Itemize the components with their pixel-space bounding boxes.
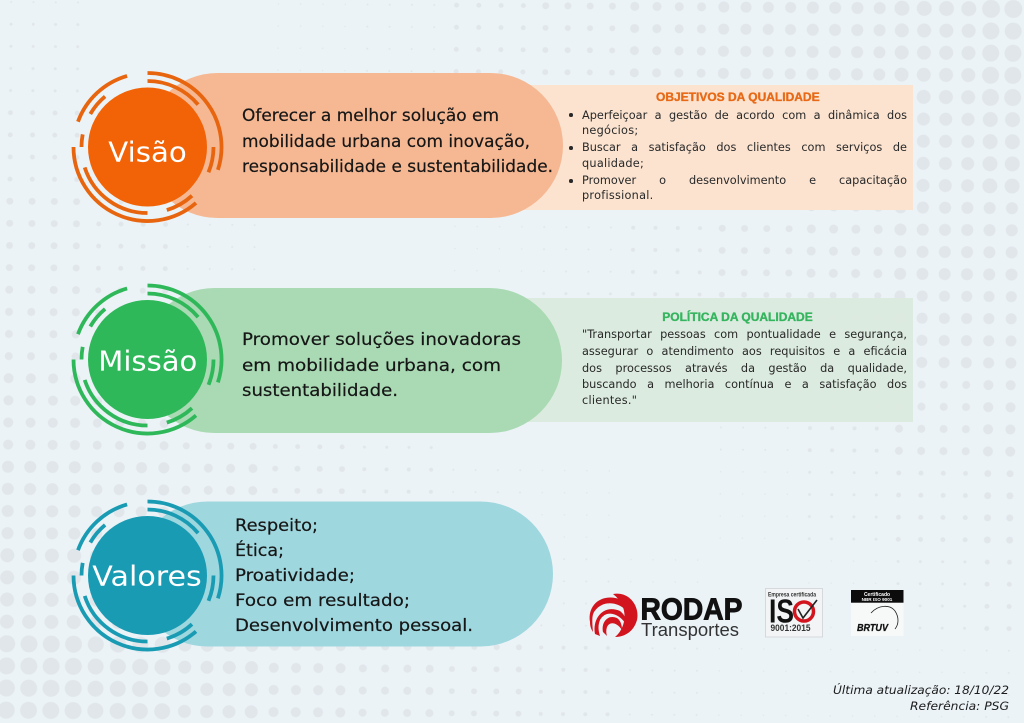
icon: rings Visão <box>73 73 222 221</box>
text: lista de valores <box>235 516 473 636</box>
icon: red O with check <box>794 600 817 621</box>
wordmark: RODAP: RODAP <box>640 592 742 626</box>
text: política: dos processos através da gestão da qualidade, <box>582 362 907 374</box>
list: objetivos: Aperfeiçoar a gestão de acordo com a dinâmica dos <box>582 108 907 122</box>
footer: update and reference: Referência: PSG <box>910 699 1009 713</box>
circle: Missão <box>88 300 207 419</box>
panel: política da qualidade <box>520 298 913 422</box>
icon: rings Missão <box>73 286 222 434</box>
list: objetivos: profissional. <box>582 189 653 202</box>
pill: Missão <box>142 288 562 433</box>
wordmark: Transportes: Transportes <box>641 620 739 640</box>
panel: objetivos da qualidade <box>520 84 913 210</box>
text: lista de valores: Desenvolvimento pessoal. <box>235 616 473 636</box>
heading: política da qualidade: POLÍTICA DA QUALIDADE <box>662 310 813 324</box>
heading: objetivos da qualidade: OBJETIVOS DA QUALIDADE <box>656 90 820 104</box>
pill: Visão <box>145 73 563 218</box>
text: missão statement: Promover soluções inovadoras <box>242 330 521 350</box>
text: lista de valores: Proatividade; <box>235 566 355 586</box>
text: política: buscando a melhoria contínua e a satisfação dos <box>582 378 907 391</box>
panel: Visão <box>73 73 563 221</box>
circle: Visão <box>88 88 207 206</box>
text: política: "Transportar pessoas com pontualidade e segurança, <box>582 328 907 341</box>
badge: BRTÜV: BRTUV <box>857 622 889 634</box>
text: política: clientes." <box>582 394 637 407</box>
text: lista de valores: Foco em resultado; <box>235 591 410 611</box>
text: visão statement: mobilidade urbana com inovação, <box>242 132 530 152</box>
badge: BRTÜV: Certificado <box>864 592 890 598</box>
list: objetivos: Buscar a satisfação dos clientes com serviços de <box>582 141 907 154</box>
badge: ISO 9001:2015 <box>766 588 822 637</box>
list: objetivos: qualidade; <box>582 157 644 170</box>
text: política <box>582 328 907 407</box>
text: política: assegurar o atendimento aos requisitos e a eficácia <box>582 345 907 358</box>
text: visão statement <box>242 106 553 177</box>
list: objetivos <box>569 108 907 202</box>
logo: RODAP Transportes <box>590 592 742 640</box>
text: visão statement: responsabilidade e sustentabilidade. <box>242 157 553 177</box>
text: visão statement: Oferecer a melhor solução em <box>242 106 499 126</box>
icon: rings Valores <box>73 502 222 650</box>
badge: BRTÜV: NBR ISO 9001 <box>862 597 893 602</box>
pill: Valores <box>135 502 553 646</box>
text: missão statement <box>242 330 521 401</box>
list: objetivos: negócios; <box>582 124 638 137</box>
circle: Valores <box>88 516 207 635</box>
badge: ISO 9001:2015: IS <box>769 592 794 630</box>
badge: ISO 9001:2015: 9001:2015 <box>770 623 811 634</box>
panel: Valores <box>73 502 553 650</box>
text: lista de valores: Respeito; <box>235 516 318 536</box>
list: objetivos: Promover o desenvolvimento e capacitação <box>582 174 907 186</box>
text: missão statement: em mobilidade urbana, com <box>242 356 501 376</box>
text: missão statement: sustentabilidade. <box>242 381 398 401</box>
label: Valores: Valores <box>92 560 202 593</box>
badge: BRTÜV <box>851 590 904 636</box>
label: Missão: Missão <box>98 345 197 378</box>
footer: update and reference: Última atualização: 18/10/22 <box>833 682 1009 697</box>
label: Visão: Visão <box>108 136 187 169</box>
footer: update and reference <box>833 682 1009 713</box>
icon: red swirl <box>590 594 637 637</box>
badge: ISO 9001:2015: Empresa certificada <box>768 592 817 598</box>
panel: Missão <box>73 286 562 434</box>
text: lista de valores: Ética; <box>235 539 284 561</box>
